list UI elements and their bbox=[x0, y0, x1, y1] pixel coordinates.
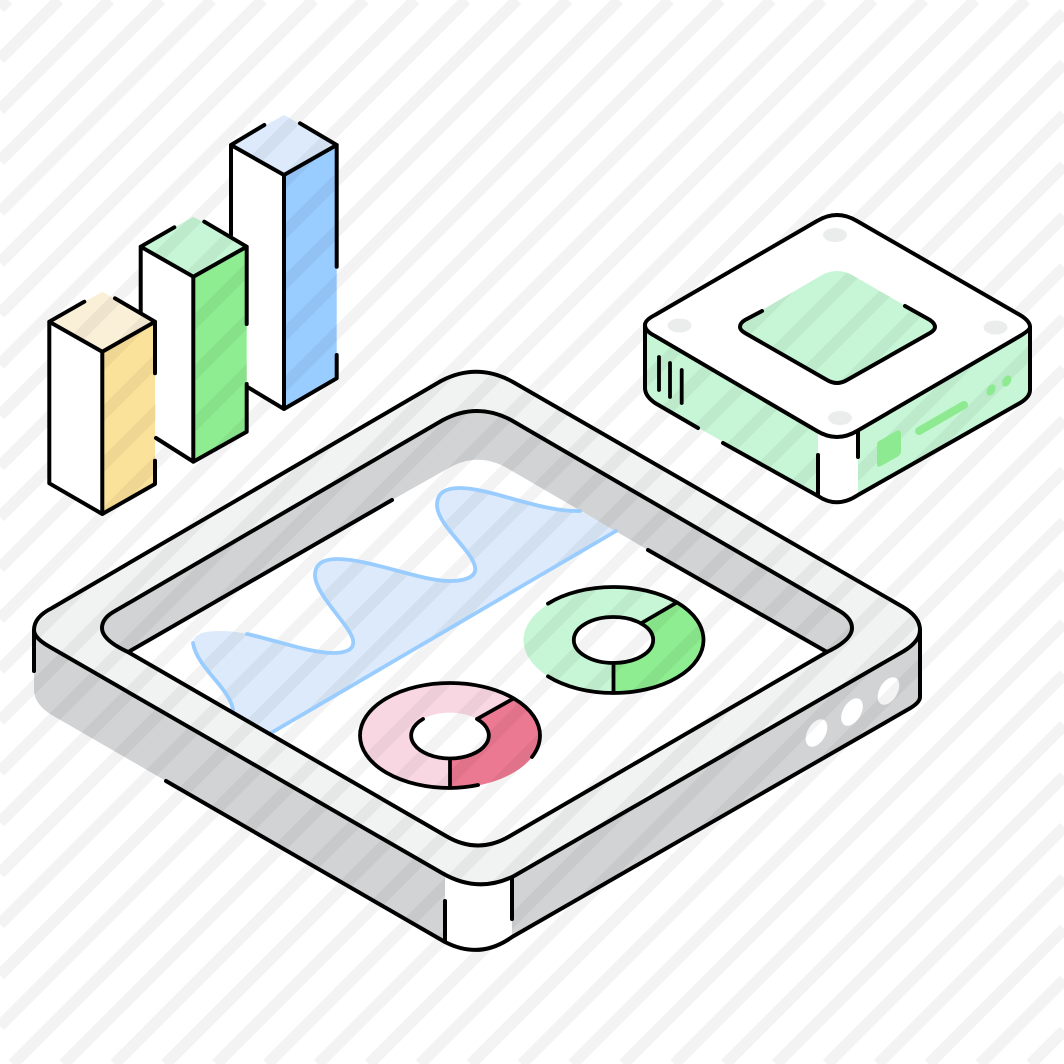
device indicators bbox=[877, 374, 1013, 467]
bar: blue (tallest) bbox=[231, 115, 337, 409]
tablet left side bbox=[34, 630, 445, 942]
tablet inner wall bbox=[102, 411, 852, 652]
tablet outlines bbox=[34, 372, 920, 884]
device front corner bbox=[818, 430, 858, 502]
bar chart: three isometric bars bbox=[49, 115, 337, 514]
device top face bbox=[645, 215, 1030, 437]
device green top panel bbox=[740, 271, 935, 383]
area chart bbox=[193, 488, 616, 733]
donut chart: pink bbox=[360, 683, 540, 788]
tablet right side with three ports bbox=[512, 630, 920, 937]
tablet: isometric frame bbox=[34, 372, 920, 950]
mini device: server box bbox=[645, 215, 1030, 502]
device vent slots bbox=[659, 357, 682, 403]
bar: green (middle) bbox=[141, 217, 247, 462]
device outlines bbox=[645, 215, 1030, 437]
tablet front corner bbox=[445, 875, 512, 950]
device left side bbox=[645, 325, 818, 496]
bar: yellow (shortest) bbox=[49, 292, 155, 514]
device right side bbox=[858, 327, 1030, 495]
donut chart: green bbox=[524, 587, 704, 693]
tablet bezel top bbox=[34, 372, 920, 884]
device corner screws bbox=[668, 228, 1008, 425]
